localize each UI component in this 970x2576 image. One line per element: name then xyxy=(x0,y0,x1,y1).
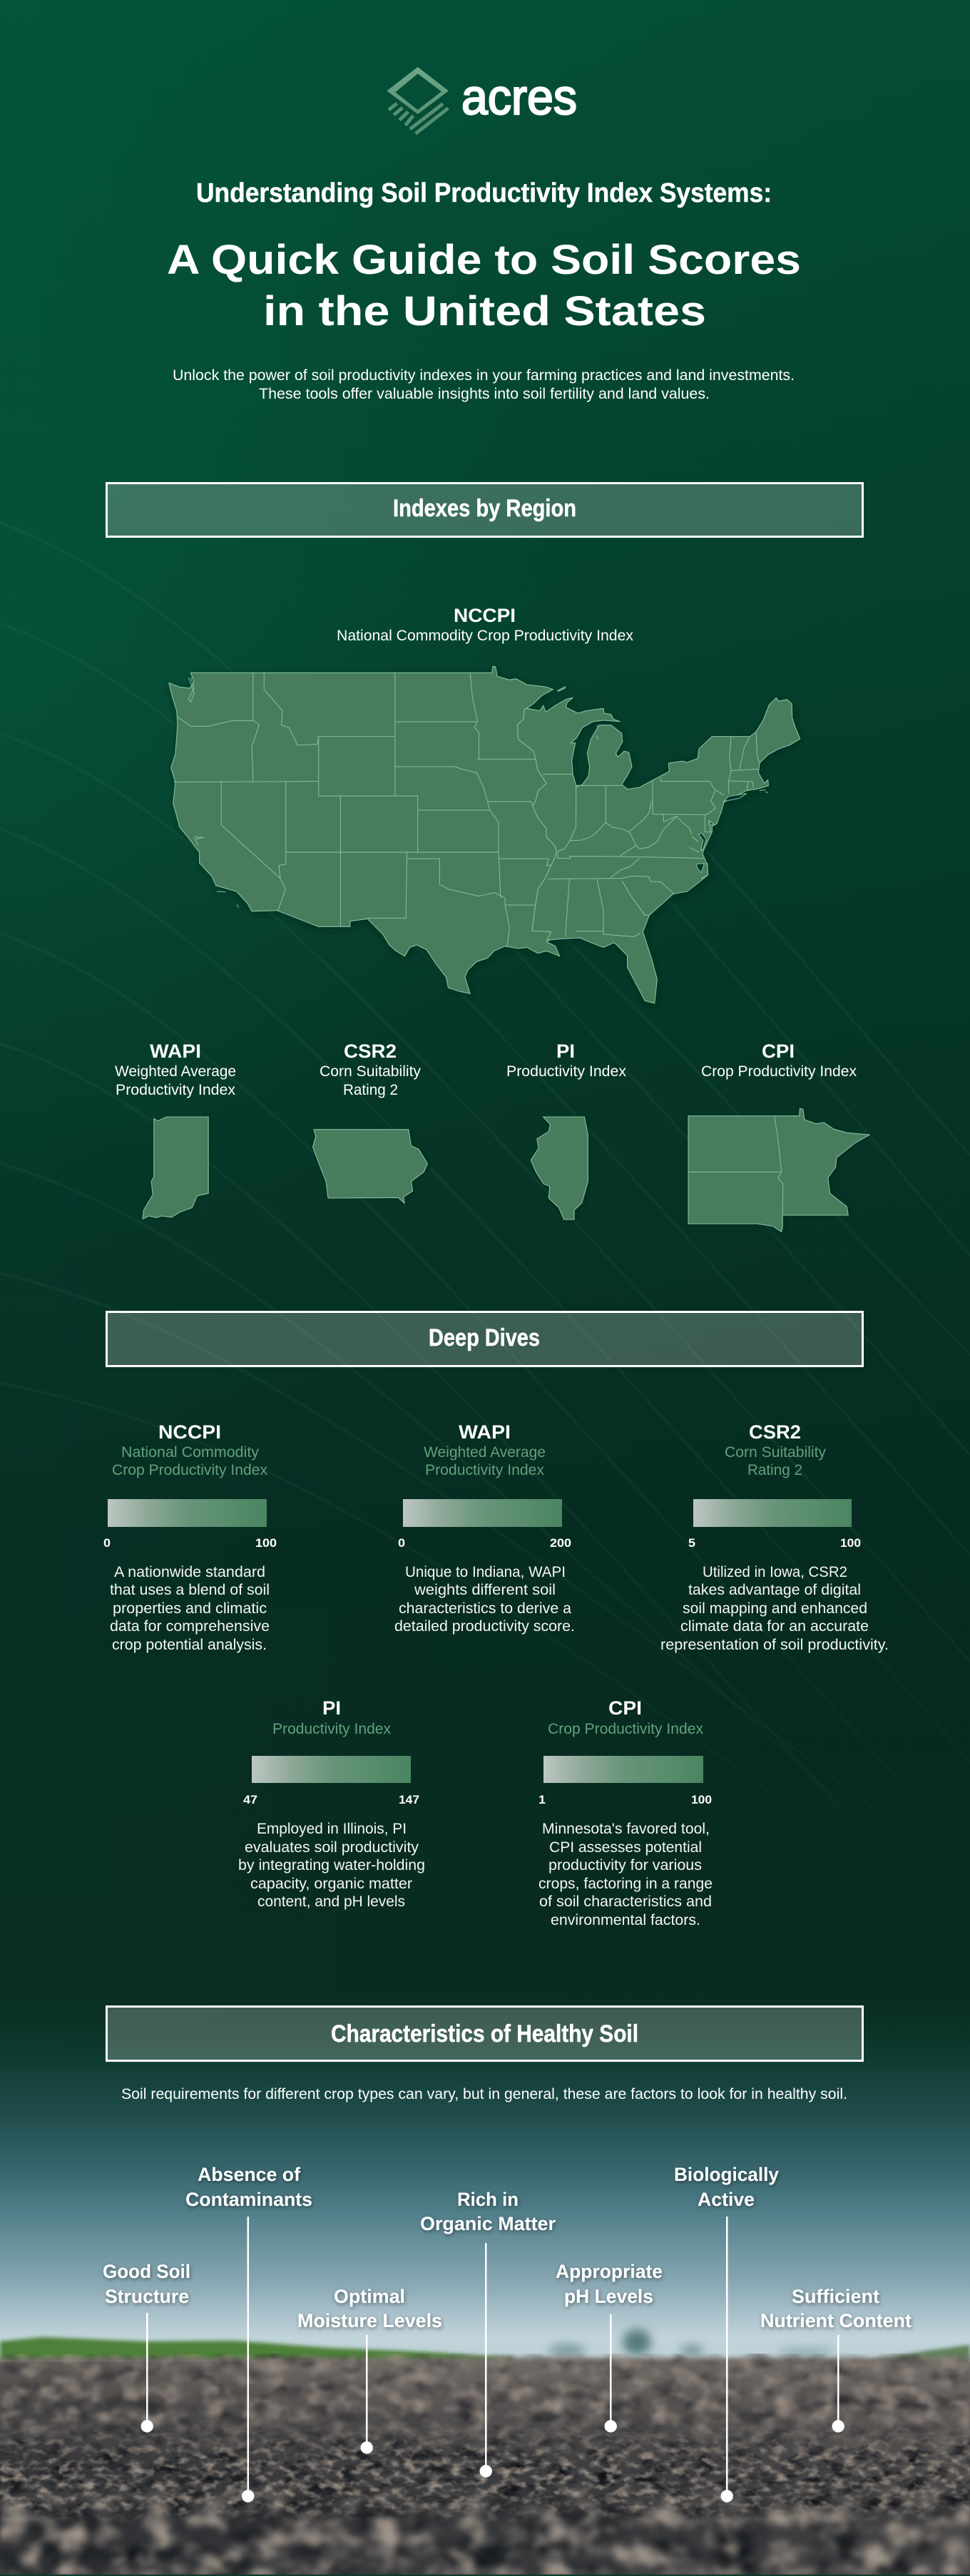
description: climate data for an accurate xyxy=(680,1618,869,1635)
intro: healthy soil: Soil requirements for different crop types can vary, but in general, these are factors to look for in healthy soil. xyxy=(121,2085,847,2102)
scale bar: 1 xyxy=(538,1793,546,1806)
NCCPI map heading xyxy=(337,605,633,644)
description: detailed productivity score. xyxy=(394,1618,575,1635)
WAPI heading xyxy=(115,1041,236,1098)
map: Illinois xyxy=(531,1117,588,1220)
description xyxy=(394,1564,575,1635)
scale bar: 100 xyxy=(691,1793,712,1806)
description: capacity, organic matter xyxy=(250,1876,412,1892)
map: North Dakota, South Dakota, Minnesota xyxy=(688,1108,869,1232)
map: Iowa xyxy=(313,1130,427,1203)
banner: Deep Dives: Deep Dives xyxy=(429,1324,540,1351)
description: Unique to Indiana, WAPI xyxy=(405,1564,566,1580)
callout: Absence of Contaminants: Absence of xyxy=(198,2164,301,2185)
description: crops, factoring in a range xyxy=(538,1876,713,1892)
description: productivity for various xyxy=(548,1857,702,1874)
photo background: sky and soil field xyxy=(0,1983,970,2576)
description: representation of soil productivity. xyxy=(660,1637,889,1653)
NCCPI map heading: NCCPI xyxy=(454,605,516,626)
main title: A Quick Guide to Soil Scores xyxy=(167,237,801,283)
callout: Optimal Moisture Levels: Moisture Levels xyxy=(297,2310,442,2331)
deep dive: WAPI xyxy=(394,1421,575,1635)
callout: Biologically Active xyxy=(674,2164,779,2503)
WAPI heading: Productivity Index xyxy=(116,1082,236,1098)
bottom edge xyxy=(0,2575,970,2576)
intro text: Unlock the power of soil productivity indexes in your farming practices and land investments. xyxy=(173,367,795,384)
scale bar: 0 xyxy=(398,1536,405,1550)
description: weights different soil xyxy=(414,1582,556,1598)
distant trees xyxy=(548,2329,834,2357)
scale bar: 5 xyxy=(688,1536,695,1550)
CSR2 heading: CSR2 xyxy=(344,1041,397,1062)
callout: Good Soil Structure xyxy=(103,2261,190,2433)
description: properties and climatic xyxy=(113,1600,267,1617)
full name: Weighted Average xyxy=(424,1444,546,1461)
callout: Optimal Moisture Levels: Optimal xyxy=(334,2286,405,2307)
NCCPI map heading: National Commodity Crop Productivity Index xyxy=(337,627,633,644)
eastern states xyxy=(517,687,800,1003)
callout: Appropriate pH Levels: pH Levels xyxy=(564,2286,653,2307)
scale bar xyxy=(538,1756,712,1806)
deep dive: CPI xyxy=(538,1697,713,1928)
description: Utilized in Iowa, CSR2 xyxy=(703,1564,847,1580)
full name: Productivity Index xyxy=(272,1721,391,1737)
soil texture, sharp midground xyxy=(0,2422,970,2523)
title: WAPI xyxy=(459,1421,511,1443)
description: content, and pH levels xyxy=(257,1893,405,1910)
CPI heading xyxy=(701,1041,857,1080)
banner: Deep Dives xyxy=(107,1312,863,1366)
description: takes advantage of digital xyxy=(688,1582,861,1598)
PI heading: Productivity Index xyxy=(506,1063,627,1080)
deep dive: PI xyxy=(238,1697,425,1910)
CSR2 heading xyxy=(320,1041,421,1098)
soil texture, far blurred xyxy=(0,2353,970,2448)
banner: Indexes by Region xyxy=(107,484,863,536)
scale bar xyxy=(398,1499,571,1550)
callout: Rich in Organic Matter: Organic Matter xyxy=(420,2213,556,2234)
description: evaluates soil productivity xyxy=(245,1839,419,1856)
description: by integrating water-holding xyxy=(238,1857,425,1874)
index: WAPI xyxy=(115,1041,236,1219)
scale bar xyxy=(103,1499,277,1550)
soil base xyxy=(0,2358,970,2576)
title: CSR2 xyxy=(749,1421,801,1443)
PI heading: PI xyxy=(556,1041,575,1062)
soil texture, near blurred xyxy=(0,2485,970,2575)
description: Employed in Illinois, PI xyxy=(257,1821,407,1837)
callout: Sufficient Nutrient Content: Nutrient Content xyxy=(760,2310,912,2331)
description: crop potential analysis. xyxy=(112,1637,267,1653)
title: CPI xyxy=(608,1697,642,1719)
main title: in the United States xyxy=(263,288,706,334)
callout: Good Soil Structure: Structure xyxy=(105,2286,189,2307)
description: CPI assesses potential xyxy=(549,1839,702,1856)
CPI heading: CPI xyxy=(762,1041,795,1062)
intro text xyxy=(173,367,795,402)
callout: Absence of Contaminants: Contaminants xyxy=(185,2189,312,2210)
western states xyxy=(169,666,562,993)
WAPI heading: WAPI xyxy=(150,1041,201,1062)
callout: Good Soil Structure: Good Soil xyxy=(103,2261,190,2282)
main title xyxy=(167,237,801,334)
description: Minnesota's favored tool, xyxy=(542,1821,710,1837)
full name: National Commodity xyxy=(121,1444,260,1461)
WAPI heading: Weighted Average xyxy=(115,1063,236,1080)
full name: Crop Productivity Index xyxy=(112,1462,267,1478)
description: environmental factors. xyxy=(551,1912,700,1928)
CSR2 heading: Corn Suitability xyxy=(320,1063,421,1080)
banner: Characteristics of Healthy Soil: Characteristics of Healthy Soil xyxy=(331,2020,638,2048)
icon: stacked diamond xyxy=(387,67,449,133)
callout: Absence of Contaminants xyxy=(185,2164,312,2503)
description xyxy=(238,1821,425,1910)
callout: Sufficient Nutrient Content: Sufficient xyxy=(792,2286,879,2307)
green tree line xyxy=(0,2337,970,2365)
callout: Appropriate pH Levels: Appropriate xyxy=(556,2261,663,2282)
decorative curved contour lines xyxy=(0,523,970,1954)
scale bar: 47 xyxy=(243,1793,257,1806)
scale bar: 100 xyxy=(255,1536,277,1550)
index: PI xyxy=(506,1041,627,1220)
callout: Biologically Active: Biologically xyxy=(674,2164,779,2185)
scale bar: 100 xyxy=(840,1536,861,1550)
scale bar xyxy=(243,1756,419,1806)
wordmark: acres xyxy=(461,69,577,125)
description: data for comprehensive xyxy=(110,1618,270,1635)
map: Indiana xyxy=(143,1117,208,1219)
title: NCCPI xyxy=(158,1421,221,1443)
description: characteristics to derive a xyxy=(399,1600,571,1617)
callout: Rich in Organic Matter xyxy=(420,2189,556,2478)
subtitle: Understanding Soil Productivity Index Systems: xyxy=(196,178,772,208)
deep dive: NCCPI xyxy=(103,1421,277,1653)
full name: Productivity Index xyxy=(425,1462,544,1478)
callout: Rich in Organic Matter: Rich in xyxy=(457,2189,519,2210)
callout: Sufficient Nutrient Content xyxy=(760,2286,912,2433)
callout: Optimal Moisture Levels xyxy=(297,2286,442,2454)
scale bar: 147 xyxy=(399,1793,419,1806)
scale bar xyxy=(688,1499,861,1550)
title: PI xyxy=(322,1697,341,1719)
PI heading xyxy=(506,1041,627,1080)
description xyxy=(660,1564,889,1653)
callout: Appropriate pH Levels xyxy=(556,2261,663,2433)
index: CPI xyxy=(688,1041,869,1232)
banner: Indexes by Region: Indexes by Region xyxy=(393,495,576,522)
description xyxy=(110,1564,270,1653)
logo: acres xyxy=(387,67,577,133)
full name xyxy=(112,1444,267,1478)
deep dive: CSR2 xyxy=(660,1421,889,1653)
description: that uses a blend of soil xyxy=(110,1582,270,1598)
CPI heading: Crop Productivity Index xyxy=(701,1063,857,1080)
scale bar: 200 xyxy=(550,1536,571,1550)
banner: Characteristics of Healthy Soil xyxy=(107,2007,863,2061)
full name: Crop Productivity Index xyxy=(548,1721,703,1737)
description: A nationwide standard xyxy=(114,1564,265,1580)
full name xyxy=(424,1444,546,1478)
description: of soil characteristics and xyxy=(539,1893,712,1910)
full name: Corn Suitability xyxy=(725,1444,826,1461)
full name xyxy=(725,1444,826,1478)
sky gradient xyxy=(0,1983,970,2368)
callout: Biologically Active: Active xyxy=(698,2189,755,2210)
intro text: These tools offer valuable insights into soil fertility and land values. xyxy=(259,385,710,402)
index: CSR2 xyxy=(313,1041,427,1203)
description xyxy=(538,1821,713,1928)
scale bar: 0 xyxy=(103,1536,111,1550)
full name: Rating 2 xyxy=(747,1462,802,1478)
CSR2 heading: Rating 2 xyxy=(343,1082,398,1098)
description: soil mapping and enhanced xyxy=(683,1600,867,1617)
map: contiguous United States xyxy=(169,666,800,1003)
